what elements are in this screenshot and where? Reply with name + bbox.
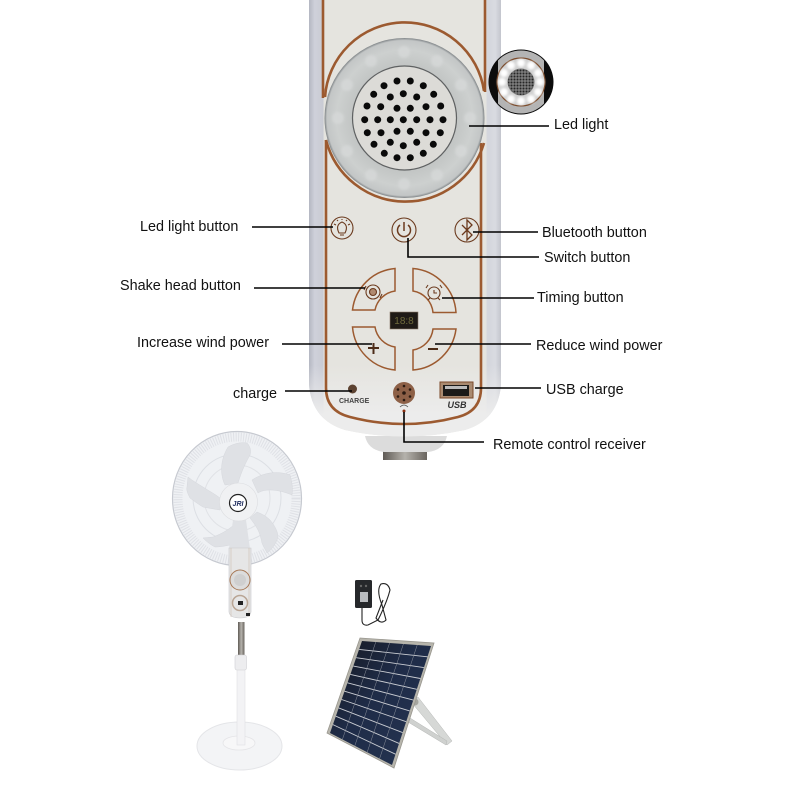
fan logo: JRI [233, 501, 244, 508]
callout: Switch button [408, 238, 630, 266]
fan guard and blades [172, 432, 302, 566]
button: shake head [352, 268, 395, 310]
callout: Remote control receiver: Remote control receiver [493, 437, 646, 453]
solar panel stand [408, 697, 452, 745]
callout: Led light [469, 117, 608, 133]
USB port [440, 382, 473, 410]
button: timing [413, 268, 456, 312]
LED light ring with speaker grille [324, 38, 484, 198]
panel: control panel close-up [309, 0, 501, 460]
callout: Reduce wind power: Reduce wind power [536, 338, 663, 354]
callout: Led light: Led light [554, 117, 608, 133]
mounting collar and pole [365, 436, 447, 460]
icon: power switch button [392, 218, 416, 242]
USB port: USB [447, 400, 467, 410]
digital display [390, 312, 418, 329]
button: reduce wind power [413, 329, 456, 370]
callout: Timing button: Timing button [537, 290, 624, 306]
solar cells [330, 641, 431, 765]
inset: LED light illuminated [488, 50, 554, 114]
solar panel frame [327, 638, 434, 768]
icon: LED light button [331, 217, 353, 239]
callout: Bluetooth button: Bluetooth button [542, 225, 647, 241]
illustration: solar panel [327, 638, 452, 768]
callout: Shake head button: Shake head button [120, 278, 241, 294]
callout: Remote control receiver [404, 412, 646, 453]
fan hub bracket [229, 520, 250, 549]
fan base [197, 722, 282, 770]
callout: charge [233, 386, 352, 402]
icon: plus [368, 343, 379, 354]
brown trim [323, 0, 485, 424]
callout: Switch button: Switch button [544, 250, 630, 266]
callout: charge: charge [233, 386, 277, 402]
panel body [309, 0, 501, 436]
icon: alarm clock [426, 285, 442, 300]
button: increase wind power [352, 327, 395, 370]
icon: minus [428, 348, 438, 350]
callout: USB charge: USB charge [546, 382, 624, 398]
illustration: power adapter [355, 580, 390, 625]
charge indicator: CHARGE [339, 398, 370, 405]
digital display: 18:8 [394, 316, 414, 327]
icon: shake head [364, 285, 382, 299]
illustration: standing fan [172, 432, 302, 770]
remote control receiver grille [393, 382, 415, 412]
callout: Increase wind power: Increase wind power [137, 335, 269, 351]
charge indicator [339, 384, 370, 405]
fan pole [235, 622, 246, 745]
callout: Led light button: Led light button [140, 219, 238, 235]
icon: Bluetooth button [455, 218, 479, 242]
fan control panel miniature [229, 548, 251, 618]
